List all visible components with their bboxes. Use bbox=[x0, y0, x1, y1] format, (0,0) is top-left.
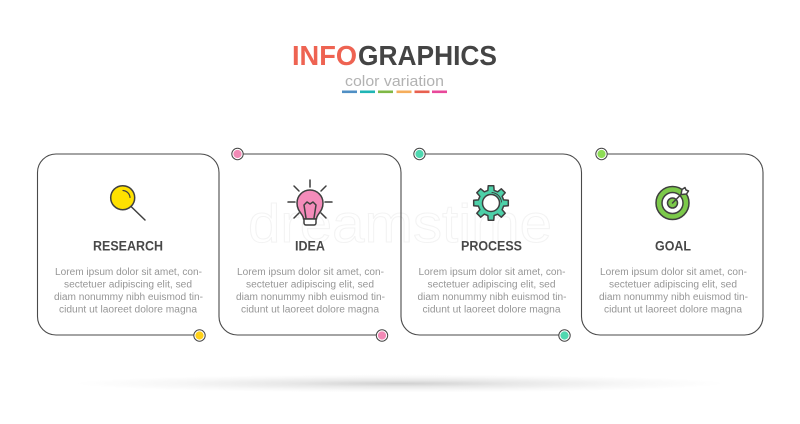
body text: idea: cidunt ut laoreet dolore magna bbox=[241, 304, 379, 316]
dot: yellow bbox=[194, 330, 205, 341]
heading: process: PROCESS bbox=[461, 238, 522, 254]
body text: goal: sectetuer adipiscing elit, sed bbox=[609, 280, 737, 290]
watermark: dreamstime bbox=[248, 194, 552, 254]
panel: goal bbox=[582, 148, 763, 335]
body text: process: Lorem ipsum dolor sit amet, con- bbox=[418, 267, 566, 278]
body text: research: Lorem ipsum dolor sit amet, con- bbox=[55, 267, 202, 278]
dot: teal bottom bbox=[559, 330, 570, 341]
body text: goal: cidunt ut laoreet dolore magna bbox=[604, 304, 742, 316]
body text: goal: diam nonummy nibh euismod tin- bbox=[599, 292, 748, 303]
body text: idea: diam nonummy nibh euismod tin- bbox=[236, 292, 385, 303]
card outline bbox=[219, 154, 401, 335]
card outline bbox=[401, 154, 582, 335]
body text: goal: Lorem ipsum dolor sit amet, con- bbox=[600, 267, 747, 278]
body text: research: sectetuer adipiscing elit, sed bbox=[64, 280, 192, 290]
heading: idea: IDEA bbox=[295, 238, 325, 254]
panel: idea bbox=[219, 148, 401, 341]
title bbox=[292, 40, 497, 71]
dot: green bbox=[596, 148, 607, 160]
body text: research: cidunt ut laoreet dolore magna bbox=[59, 304, 197, 316]
dot: teal top bbox=[414, 148, 425, 160]
icon: gear bbox=[474, 186, 508, 220]
panel: process bbox=[401, 148, 582, 341]
card outline bbox=[582, 154, 763, 335]
title word: GRAPHICS: GRAPHICS bbox=[358, 40, 497, 71]
colour bars bbox=[342, 90, 447, 93]
dot: pink top bbox=[232, 148, 243, 160]
dot: pink bottom bbox=[376, 330, 388, 341]
heading: goal: GOAL bbox=[655, 238, 691, 254]
card outline bbox=[38, 154, 219, 335]
panel: research bbox=[38, 154, 219, 341]
icon: target bbox=[656, 186, 689, 220]
body text: idea: sectetuer adipiscing elit, sed bbox=[246, 280, 374, 290]
icon: light bulb bbox=[288, 180, 332, 225]
subtitle: color variation bbox=[345, 73, 444, 90]
body text: research: diam nonummy nibh euismod tin- bbox=[54, 292, 203, 303]
icon: magnifying glass bbox=[111, 186, 145, 220]
body text: research bbox=[54, 267, 203, 316]
body text: process bbox=[418, 267, 566, 316]
heading: research: RESEARCH bbox=[93, 238, 163, 254]
ground shadow bbox=[75, 374, 725, 392]
body text: goal bbox=[599, 267, 748, 316]
body text: process: cidunt ut laoreet dolore magna bbox=[422, 304, 561, 316]
body text: idea bbox=[236, 267, 385, 316]
title word: INFO: INFO bbox=[292, 40, 357, 71]
body text: idea: Lorem ipsum dolor sit amet, con- bbox=[237, 267, 384, 278]
body text: process: sectetuer adipiscing elit, sed bbox=[428, 280, 556, 290]
body text: process: diam nonummy nibh euismod tin- bbox=[418, 292, 566, 303]
